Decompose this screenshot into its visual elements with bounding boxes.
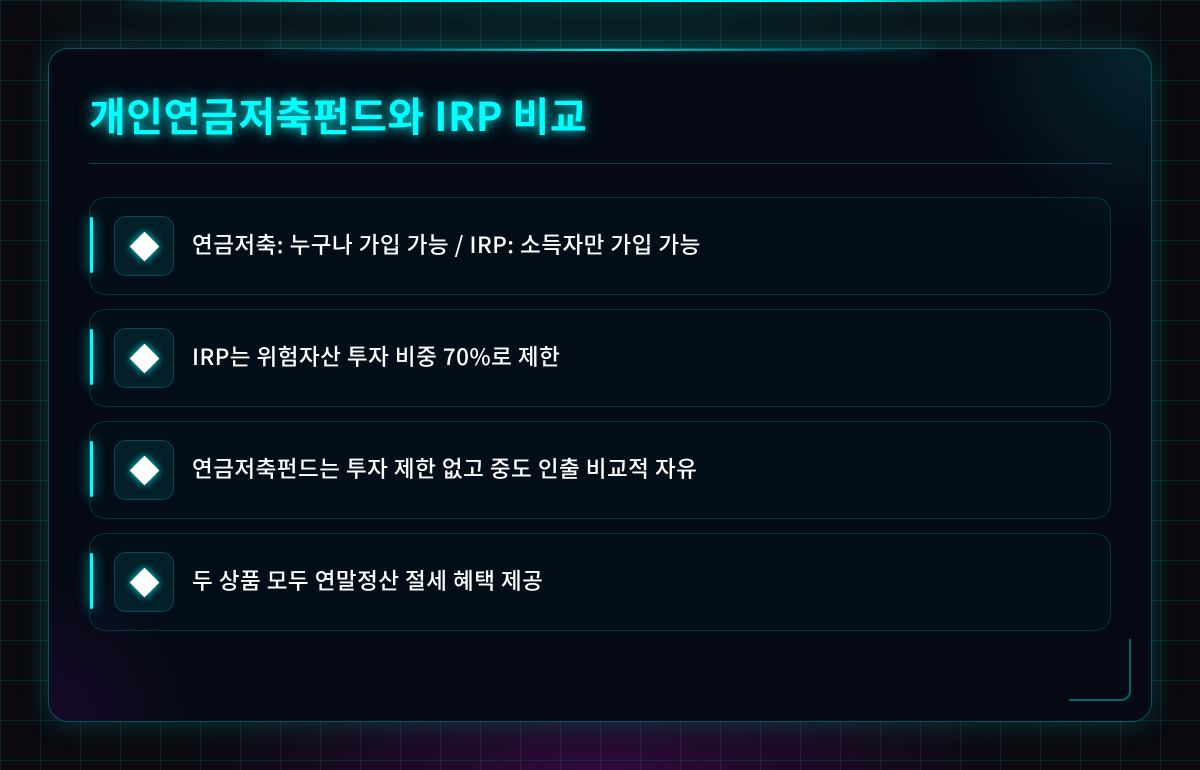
item text 2: IRP는 위험자산 투자 비중 70%로 제한 bbox=[192, 340, 560, 372]
list item 1 bbox=[89, 197, 1111, 295]
accent bar 2 bbox=[90, 329, 93, 385]
card top glow bar bbox=[268, 49, 932, 51]
item text 1: 연금저축: 누구나 가입 가능 / IRP: 소득자만 가입 가능 bbox=[192, 228, 701, 260]
icon: diamond 4 bbox=[114, 552, 174, 612]
accent bar 3 bbox=[90, 441, 93, 497]
list item 2 bbox=[89, 309, 1111, 407]
icon: diamond 3 bbox=[114, 440, 174, 500]
item text 3: 연금저축펀드는 투자 제한 없고 중도 인출 비교적 자유 bbox=[192, 452, 697, 484]
icon: diamond 2 bbox=[114, 328, 174, 388]
title: 개인연금저축펀드와 IRP 비교 bbox=[89, 85, 587, 143]
accent bar 4 bbox=[90, 553, 93, 609]
top glow bar bbox=[120, 0, 1080, 2]
item text 4: 두 상품 모두 연말정산 절세 혜택 제공 bbox=[192, 564, 543, 596]
corner bracket decoration bbox=[1069, 639, 1131, 701]
accent bar 1 bbox=[90, 217, 93, 273]
icon: diamond 1 bbox=[114, 216, 174, 276]
list item 4 bbox=[89, 533, 1111, 631]
list item 3 bbox=[89, 421, 1111, 519]
